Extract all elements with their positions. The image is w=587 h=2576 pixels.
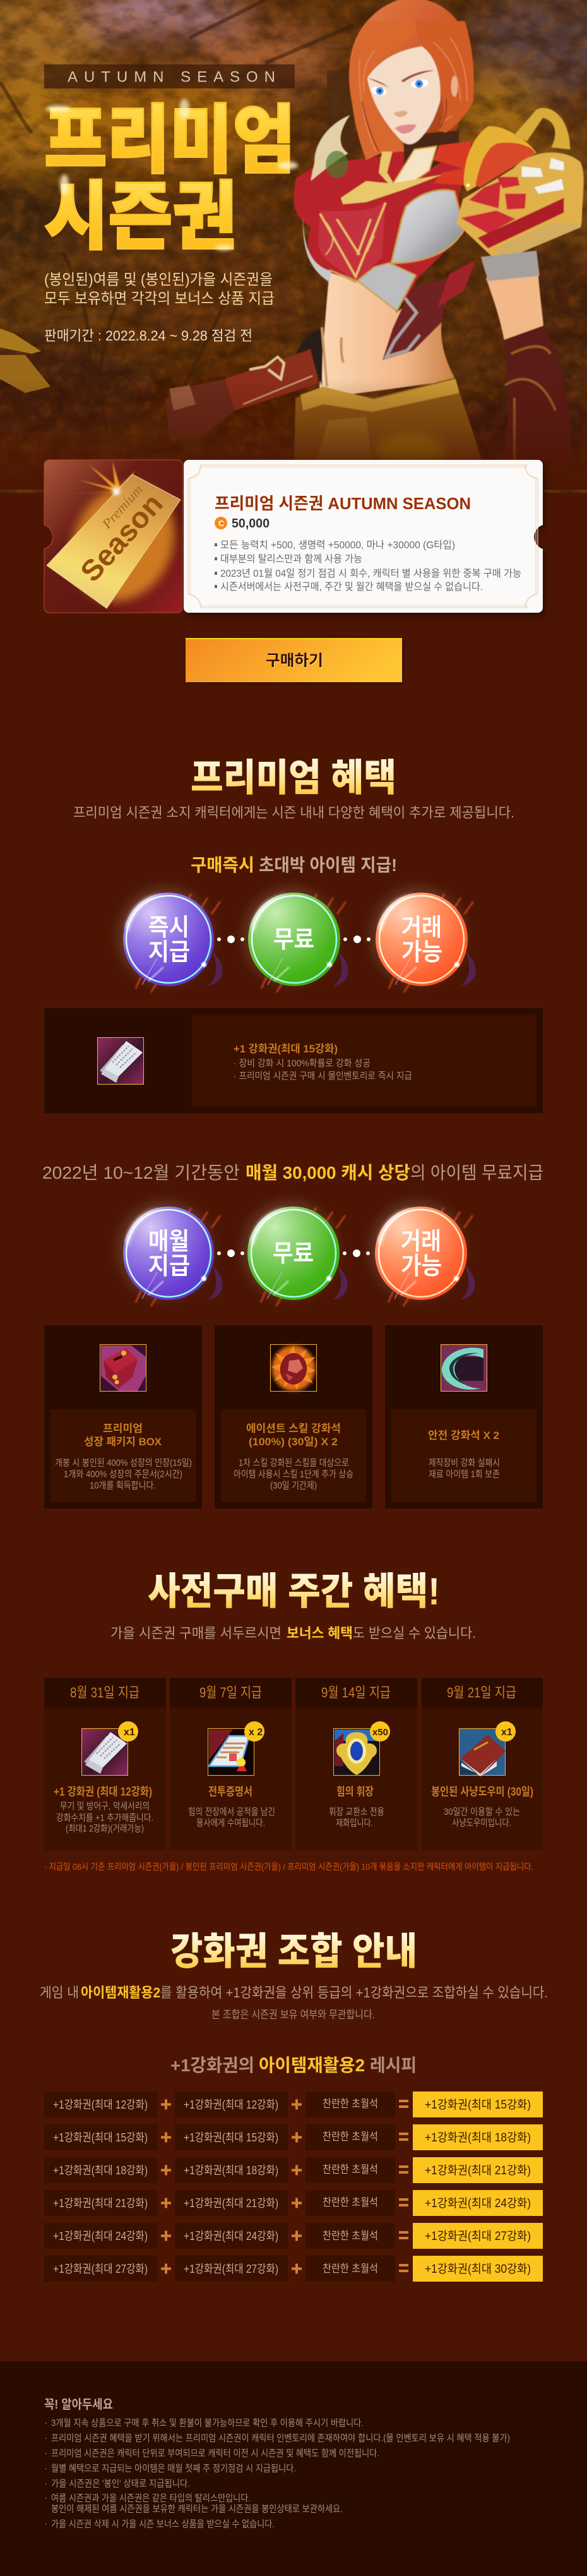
card: ancient skill stone: (100%) (30일) X 2	[249, 1436, 338, 1448]
section heading: enhancement ticket combination: 강화권 조합 안내	[170, 1930, 417, 1973]
recipe row 6	[44, 2256, 543, 2282]
column: Sep 14: 9월 14일 지급	[321, 1685, 391, 1700]
buy button	[186, 638, 402, 682]
hero title	[44, 99, 298, 259]
benefits list: 대부분의 탈리스만과 함께 사용 가능	[220, 553, 362, 565]
card: ancient skill stone: 아이템 사용시 스킬 1단계 추가 상승	[234, 1469, 353, 1479]
subheading: monthly items	[42, 1163, 543, 1183]
hair back	[349, 0, 469, 154]
column: Sep 21: 9월 21일 지급	[447, 1685, 516, 1700]
panel: instant item	[44, 1008, 543, 1113]
notice list: 봉인이 해제된 여름 시즌권을 보유한 캐릭터는 가을 시즌권을 봉인상태로 보관하세요.	[51, 2504, 343, 2514]
card: safe enhancement stone: 재료 아이템 1회 보존	[429, 1469, 500, 1479]
recipe row 6: +1강화권(최대 27강화)	[184, 2263, 278, 2275]
section heading: enhancement ticket combination: 를 활용하여 +1강화권을 상위 등급의 +1강화권으로 조합하실 수 있습니다.	[160, 1985, 548, 2001]
notice list: 가을 시즌권은 '봉인' 상태로 지급됩니다.	[51, 2479, 190, 2489]
notice list: ·	[44, 2433, 47, 2443]
column: Sep 21: 사냥도우미입니다.	[452, 1818, 511, 1828]
column: Sep 7: 전투증명서	[208, 1785, 252, 1798]
notice list: 프리미엄 시즌권은 캐릭터 단위로 부여되므로 캐릭터 이전 시 시즌권 및 혜택도 함께 이전됩니다.	[51, 2448, 379, 2459]
card: growth package box: 성장 패키지 BOX	[84, 1436, 162, 1448]
recipe row 3: +1강화권(최대 18강화)	[53, 2164, 148, 2177]
column: Sep 7: x 2	[249, 1727, 263, 1738]
orb: tradable: 거래	[401, 915, 442, 941]
price with coin: 50,000	[232, 517, 270, 531]
orbs row 2	[117, 1200, 475, 1306]
weekly footnote: · 지급일 08시 기준 프리미엄 시즌권(가을) / 봉인된 프리미엄 시즌권(가을) / 프리미엄 시즌권(가을) 10개 묶음을 소지한 캐릭터에게 아이템이 지급됩니다.	[44, 1862, 533, 1872]
recipe title: 레시피	[370, 2055, 417, 2075]
item description: +1 강화권(최대 15강화)	[234, 1043, 338, 1055]
recipe title: 아이템재활용2	[259, 2055, 365, 2075]
recipe row 4: +1강화권(최대 21강화)	[184, 2197, 278, 2210]
column: Sep 14: 힘의 휘장	[336, 1785, 374, 1798]
weekly reward columns	[44, 1678, 543, 1850]
orb: tradable	[369, 1200, 475, 1306]
section heading: pre-purchase weekly benefits: 도 받으실 수 있습니다.	[353, 1625, 476, 1641]
recipe row 1: +1강화권(최대 12강화)	[184, 2098, 278, 2111]
subheading: instant item: 구매즉시	[191, 855, 254, 875]
column: Aug 31	[44, 1678, 166, 1850]
section heading: enhancement ticket combination: 아이템재활용2	[81, 1985, 160, 2001]
notice list: 월별 혜택으로 지급되는 아이템은 매월 첫째 주 정기점검 시 지급됩니다.	[51, 2464, 296, 2474]
recipe title	[170, 2055, 417, 2075]
connector dots	[217, 936, 244, 943]
notice list: 프리미엄 시즌권 혜택을 받기 위해서는 프리미엄 시즌권이 캐릭터 인벤토리에 존재하여야 합니다.(몰 인벤토리 보유 시 혜택 적용 불가)	[51, 2433, 510, 2443]
card: growth package box	[44, 1325, 202, 1508]
section heading: enhancement ticket combination	[40, 1930, 548, 2021]
product name: 프리미엄 시즌권 AUTUMN SEASON	[215, 494, 471, 513]
lower body, arms and belt	[165, 265, 572, 468]
notice list: ·	[44, 2463, 47, 2474]
orbs row 1	[117, 886, 476, 992]
benefits list	[215, 539, 521, 593]
hero title: 프리미엄	[44, 99, 295, 183]
recipe row 6: +1강화권(최대 27강화)	[53, 2263, 148, 2275]
section heading: premium benefits: 프리미엄 시즌권 소지 캐릭터에게는 시즌 내내 다양한 혜택이 추가로 제공됩니다.	[73, 805, 514, 821]
orb: monthly: 지급	[148, 1253, 190, 1280]
column: Sep 21: 30일간 이용할 수 있는	[444, 1807, 520, 1817]
recipe row 3: +1강화권(최대 21강화)	[425, 2164, 531, 2177]
price with coin	[215, 517, 270, 531]
head and upper armor detail	[341, 21, 584, 281]
recipe row 2	[44, 2124, 543, 2150]
recipe row 4: 찬란한 초월석	[323, 2196, 378, 2208]
recipe row 3: +1강화권(최대 18강화)	[184, 2164, 278, 2177]
season tag: AUTUMN SEASON	[68, 68, 275, 86]
section heading: pre-purchase weekly benefits: 보너스 혜택	[287, 1625, 353, 1641]
orb: tradable: 가능	[401, 939, 442, 966]
benefits list: 모든 능력치 +500, 생명력 +50000, 마나 +30000 (G타입)	[220, 539, 455, 551]
recipe table	[44, 2091, 543, 2282]
recipe row 6: 찬란한 초월석	[323, 2263, 378, 2275]
orb: free: 무료	[273, 1241, 314, 1267]
recipe title: +1강화권의	[170, 2055, 254, 2075]
column: Aug 31: +1 강화권 (최대 12강화)	[54, 1785, 152, 1798]
orb: instant: 지급	[148, 939, 190, 966]
column: Sep 14: x50	[372, 1727, 388, 1738]
character: redhead warrior	[165, 0, 584, 468]
notice heading: 꼭! 알아두세요	[44, 2397, 113, 2412]
hero description: (봉인된)여름 및 (봉인된)가을 시즌권을	[44, 272, 273, 289]
orb: tradable: 거래	[401, 1229, 441, 1255]
armored torso and shoulders	[294, 115, 475, 311]
column: Sep 14: 재화입니다.	[336, 1818, 373, 1828]
thatched hut	[0, 328, 50, 393]
recipe row 2: +1강화권(최대 18강화)	[425, 2131, 531, 2145]
connector dots	[343, 936, 371, 943]
notice list: ·	[44, 2448, 47, 2459]
column: Sep 7	[170, 1678, 292, 1850]
section heading: pre-purchase weekly benefits: 사전구매 주간 혜택!	[148, 1570, 440, 1613]
recipe row 1	[44, 2091, 543, 2117]
subheading: monthly items: 2022년 10~12월 기간동안	[42, 1163, 240, 1183]
column: Sep 21	[422, 1678, 543, 1850]
column: Sep 7: 9월 7일 지급	[199, 1685, 262, 1700]
orb: free	[242, 1200, 348, 1306]
orb: tradable	[370, 886, 476, 992]
hero description	[44, 272, 275, 308]
recipe row 1: 찬란한 초월석	[323, 2098, 378, 2110]
orb: instant: 즉시	[148, 915, 189, 941]
orb: free	[242, 886, 348, 992]
section heading: premium benefits	[73, 757, 514, 821]
product card	[44, 460, 543, 618]
recipe row 2: 찬란한 초월석	[323, 2131, 378, 2143]
orb: monthly: 매월	[148, 1229, 189, 1255]
section heading: premium benefits: 프리미엄 혜택	[191, 757, 396, 799]
ticket image panel: Premium	[98, 482, 146, 532]
notice list: 3개월 지속 상품으로 구매 후 취소 및 환불이 불가능하므로 확인 후 이용해 주시기 바랍니다.	[51, 2418, 364, 2428]
subheading: instant item	[191, 855, 397, 875]
column: Aug 31: x1	[124, 1727, 135, 1738]
section heading: enhancement ticket combination: 게임 내	[40, 1985, 79, 2001]
recipe row 4: +1강화권(최대 24강화)	[425, 2196, 531, 2210]
ticket image panel	[44, 460, 193, 618]
benefits list: 시즌서버에서는 사전구매, 주간 및 월간 혜택을 받으실 수 없습니다.	[220, 581, 483, 593]
notice list: ·	[44, 2417, 47, 2428]
sale period: 판매기간 : 2022.8.24 ~ 9.28 점검 전	[44, 328, 252, 344]
column: Sep 14: 휘장 교환소 전용	[329, 1807, 384, 1817]
card: growth package box: 1개와 400% 성장의 주문서(2시간)	[64, 1469, 182, 1479]
card: ancient skill stone: (30일 기간제)	[270, 1481, 317, 1491]
price with coin: C	[218, 519, 225, 528]
card: safe enhancement stone: 제작장비 강화 실패시	[429, 1458, 500, 1468]
notice list	[44, 2417, 510, 2529]
orb: monthly	[117, 1200, 223, 1306]
notice list: ·	[44, 2493, 47, 2503]
column: Sep 21: x1	[501, 1727, 513, 1738]
section heading: enhancement ticket combination: 본 조합은 시즌권 보유 여부와 무관합니다.	[211, 2009, 375, 2021]
autumn forest background	[0, 0, 587, 493]
ticket image panel: Season	[74, 487, 169, 588]
column: Aug 31: 강화수치를 +1 추가해줍니다.	[56, 1813, 153, 1823]
hero illustration	[0, 0, 587, 493]
description panel	[184, 460, 543, 613]
orb: instant	[117, 886, 223, 992]
column: Sep 7: 힘의 전장에서 공적을 남긴	[188, 1807, 275, 1817]
recipe row 5: 찬란한 초월석	[323, 2230, 378, 2242]
column: Aug 31: 무기 및 방어구, 악세서리의	[60, 1801, 150, 1812]
recipe row 3: 찬란한 초월석	[323, 2164, 378, 2176]
notice list: 가을 시즌권 삭제 시 가을 시즌 보너스 상품을 받으실 수 없습니다.	[51, 2519, 275, 2529]
item description: · 프리미엄 시즌권 구매 시 몰인벤토리로 즉시 지급	[234, 1071, 412, 1081]
subheading: monthly items: 의 아이템 무료지급	[410, 1163, 543, 1183]
item description: · 장비 강화 시 100%확률로 강화 성공	[234, 1058, 371, 1069]
recipe row 5: +1강화권(최대 24강화)	[53, 2230, 148, 2242]
recipe row 4	[44, 2190, 543, 2216]
recipe row 5: +1강화권(최대 24강화)	[184, 2230, 278, 2242]
hero title: 시즌권	[44, 176, 237, 259]
recipe row 2: +1강화권(최대 15강화)	[184, 2131, 278, 2144]
subheading: instant item: 초대박 아이템 지급!	[259, 855, 397, 875]
orb: tradable: 가능	[401, 1253, 442, 1280]
recipe row 4: +1강화권(최대 21강화)	[53, 2197, 148, 2210]
benefits list: 2023년 01월 04일 정기 점검 시 회수, 캐릭터 별 사용을 위한 중복 구매 가능	[220, 568, 521, 579]
monthly item cards	[44, 1325, 543, 1508]
hero description: 모두 보유하면 각각의 보너스 상품 지급	[44, 291, 275, 308]
card: growth package box: 프리미엄	[103, 1423, 143, 1435]
fade to background	[0, 379, 587, 490]
connector dots	[343, 1249, 370, 1257]
notice list: 여름 시즌권과 가을 시즌권은 같은 타입의 탈리스만입니다.	[51, 2493, 251, 2504]
card: growth package box: 10개를 획득합니다.	[90, 1481, 156, 1491]
card: safe enhancement stone	[385, 1325, 543, 1508]
section heading: pre-purchase weekly benefits: 가을 시즌권 구매를 서두르시면	[110, 1625, 282, 1641]
recipe row 1: +1강화권(최대 12강화)	[53, 2098, 148, 2111]
card: ancient skill stone	[215, 1325, 372, 1508]
footer notice panel	[0, 2361, 587, 2576]
column: Aug 31: 8월 31일 지급	[70, 1685, 139, 1700]
connector dots	[217, 1249, 244, 1257]
subheading: monthly items: 매월 30,000 캐시 상당	[246, 1163, 410, 1183]
recipe row 6: +1강화권(최대 30강화)	[425, 2262, 531, 2276]
recipe row 5: +1강화권(최대 27강화)	[425, 2229, 531, 2243]
column: Sep 7: 용사에게 수여됩니다.	[196, 1818, 265, 1828]
recipe row 1: +1강화권(최대 15강화)	[425, 2098, 531, 2112]
column: Aug 31: (최대1 2강화)(거래가능)	[66, 1823, 144, 1834]
card: growth package box: 개봉 시 봉인된 400% 성장의 인장(15일)	[55, 1458, 192, 1468]
notice list: ·	[44, 2519, 47, 2529]
recipe row 3	[44, 2157, 543, 2183]
recipe row 5	[44, 2223, 543, 2249]
recipe row 2: +1강화권(최대 15강화)	[53, 2131, 148, 2144]
notice list: ·	[44, 2478, 47, 2489]
card: safe enhancement stone: 안전 강화석 X 2	[428, 1429, 499, 1441]
item description	[234, 1043, 412, 1081]
season tag	[44, 64, 295, 88]
orb: free: 무료	[273, 927, 314, 953]
card: ancient skill stone: 1차 스킬 강화된 스킬을 대상으로	[239, 1458, 349, 1468]
icon: enhancement scroll	[97, 1037, 144, 1084]
column: Sep 14	[295, 1678, 417, 1850]
buy button: 구매하기	[266, 653, 323, 670]
column: Sep 21: 봉인된 사냥도우미 (30일)	[431, 1785, 533, 1798]
section heading: pre-purchase weekly benefits	[110, 1570, 476, 1641]
card: ancient skill stone: 에이션트 스킬 강화석	[246, 1423, 341, 1435]
